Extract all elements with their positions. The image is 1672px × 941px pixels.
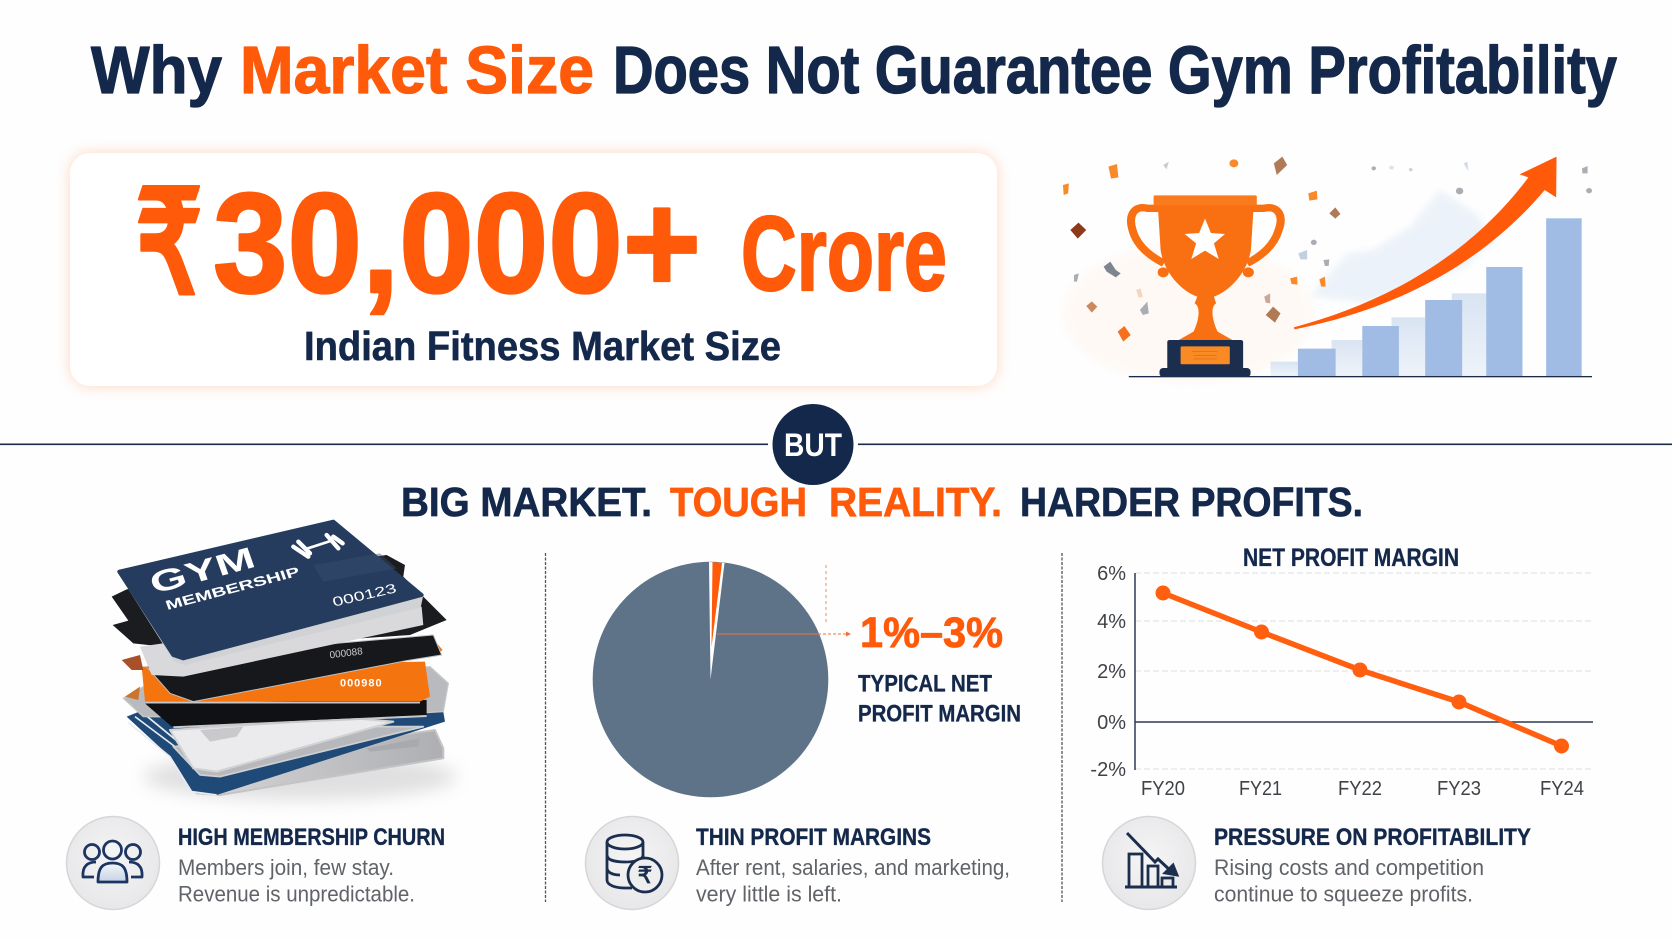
illustration: trophy and growth chart — [1062, 157, 1592, 383]
background bars — [1271, 293, 1486, 376]
market size value: ₹ — [136, 164, 202, 323]
title — [91, 33, 1617, 108]
line chart: net profit margin — [1090, 544, 1593, 800]
panel: thin profit margins — [586, 816, 1010, 910]
leader line — [717, 565, 851, 636]
middle cards — [123, 667, 448, 718]
pie callout label: TYPICAL NET — [858, 670, 992, 698]
x axis labels: FY24 — [1540, 778, 1584, 800]
body text: Members join, few stay. — [178, 855, 394, 880]
body text — [1214, 855, 1484, 906]
baseline — [1129, 376, 1592, 377]
x axis labels — [1141, 778, 1584, 800]
confetti — [1063, 157, 1592, 342]
subheading: REALITY. — [829, 479, 1002, 525]
pie callout value: 1%–3% — [860, 609, 1003, 657]
body text — [178, 855, 415, 906]
illustration: stack of gym membership cards: 000088 — [329, 646, 364, 661]
pie chart — [593, 562, 1021, 797]
body text: Revenue is unpredictable. — [178, 882, 415, 906]
illustration: stack of gym membership cards: 000123 — [330, 580, 398, 610]
subheading: TOUGH — [670, 479, 807, 525]
panel: pressure on profitability — [1102, 816, 1531, 910]
rising bars — [1298, 218, 1582, 376]
subheading: BIG MARKET. — [401, 479, 652, 525]
body text: Rising costs and competition — [1214, 855, 1484, 880]
y axis labels: 6% — [1097, 563, 1126, 585]
icon: barbell — [293, 535, 343, 557]
title: Why — [91, 33, 222, 108]
illustration: stack of gym membership cards: MEMBERSHIP — [163, 564, 302, 613]
column divider — [1061, 553, 1063, 902]
title: Market Size — [240, 33, 594, 108]
illustration: stack of gym membership cards: 000980 — [340, 678, 383, 690]
divider line — [0, 444, 1672, 445]
data line — [1156, 586, 1569, 754]
bottom cards — [180, 730, 443, 795]
gridlines — [1135, 573, 1593, 769]
icon: people — [66, 816, 160, 910]
badge: BUT — [768, 400, 858, 490]
x axis labels: FY23 — [1437, 778, 1481, 800]
body text: continue to squeeze profits. — [1214, 882, 1473, 906]
market size value: 30,000+ — [213, 164, 701, 323]
column divider — [544, 553, 546, 902]
chart title: NET PROFIT MARGIN — [1243, 544, 1459, 572]
icon: coins with rupee: ₹ — [638, 862, 653, 888]
subheading: HARDER PROFITS. — [1020, 479, 1363, 525]
y axis labels: 4% — [1097, 611, 1126, 633]
trophy — [1131, 195, 1281, 377]
axes — [1135, 573, 1593, 770]
body text: very little is left. — [696, 882, 842, 906]
panel: high membership churn — [66, 816, 445, 910]
y axis labels — [1090, 563, 1126, 781]
badge: BUT: BUT — [784, 427, 842, 463]
top card — [119, 522, 422, 663]
y axis labels: 0% — [1097, 712, 1126, 734]
market size caption: Indian Fitness Market Size — [304, 323, 781, 369]
body text: After rent, salaries, and marketing, — [696, 855, 1010, 880]
pie callout label — [858, 670, 1021, 728]
pie callout label: PROFIT MARGIN — [858, 700, 1021, 728]
heading: THIN PROFIT MARGINS — [696, 824, 931, 851]
heading: PRESSURE ON PROFITABILITY — [1214, 824, 1531, 851]
x axis labels: FY21 — [1239, 778, 1282, 800]
x axis labels: FY20 — [1141, 778, 1185, 800]
x axis labels: FY22 — [1338, 778, 1382, 800]
growth arrow — [1294, 157, 1557, 329]
icon: falling bars — [1102, 816, 1196, 910]
body text — [696, 855, 1010, 906]
subheading — [401, 479, 1363, 525]
market size unit: Crore — [741, 195, 947, 313]
panel: market size — [70, 153, 997, 386]
card text: GYM — [145, 541, 259, 600]
y axis labels: -2% — [1090, 759, 1126, 781]
illustration: stack of gym membership cards — [112, 522, 457, 800]
icon: coins with rupee — [586, 816, 678, 910]
y axis labels: 2% — [1097, 661, 1126, 683]
heading: HIGH MEMBERSHIP CHURN — [178, 824, 445, 851]
